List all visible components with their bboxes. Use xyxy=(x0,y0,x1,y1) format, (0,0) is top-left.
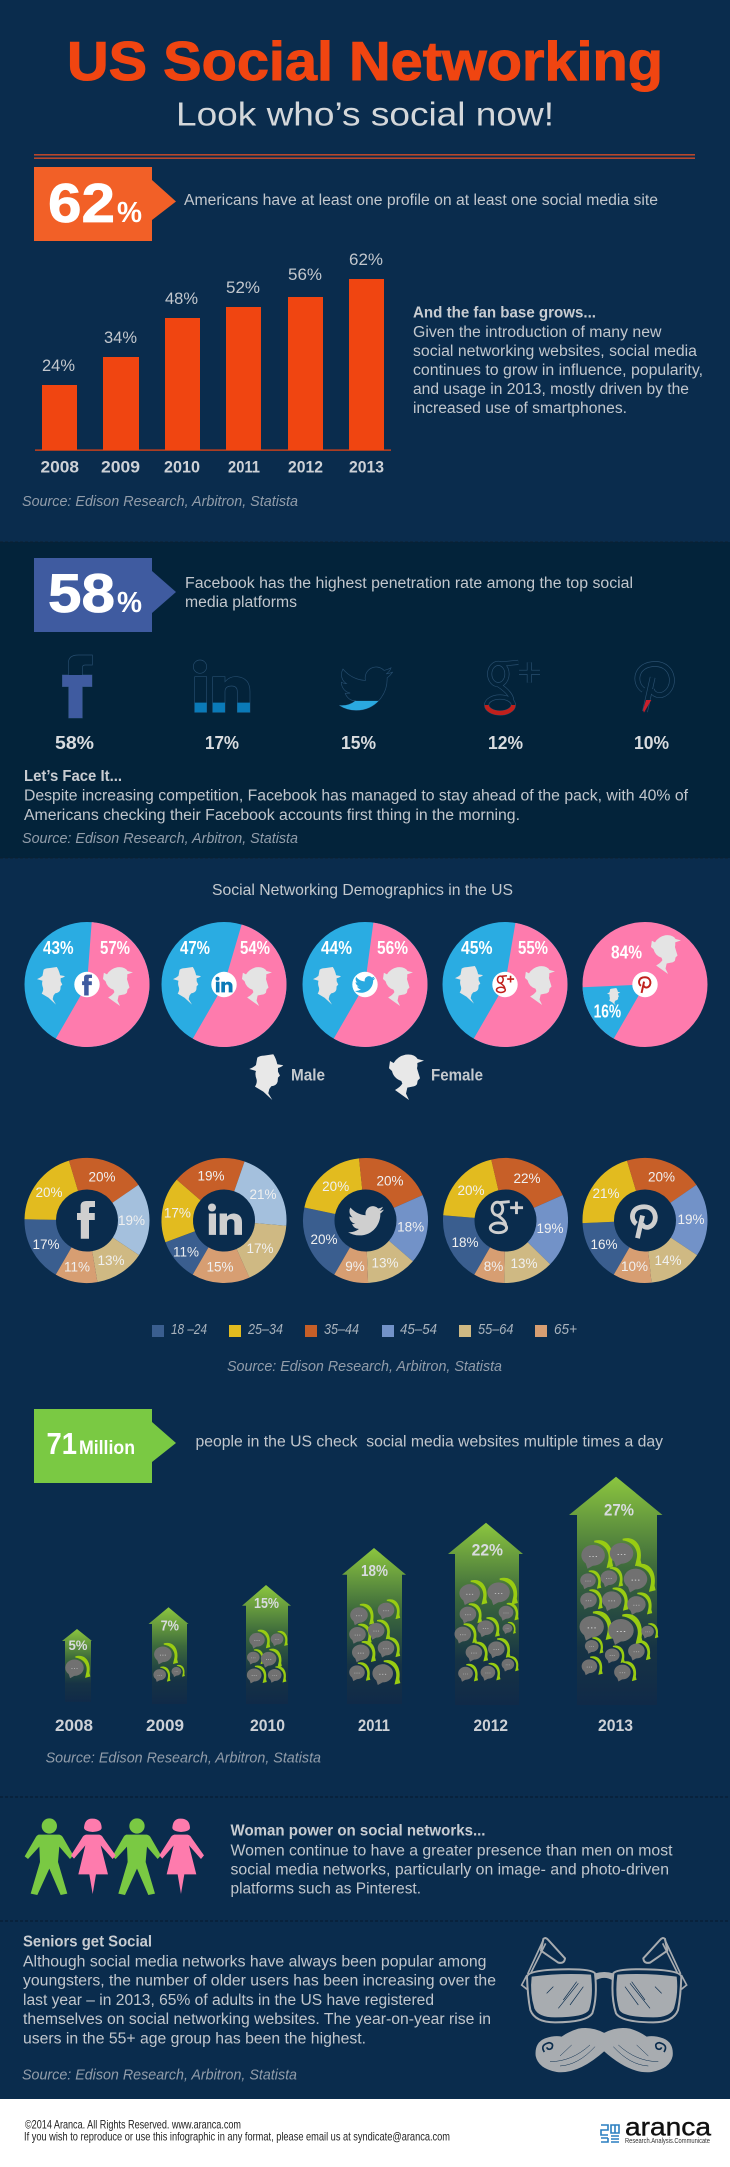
source note: Source: Edison Research, Arbitron, Statista xyxy=(227,1358,502,1375)
pie: facebook gender split: 57% xyxy=(100,938,130,958)
legend: age groups xyxy=(152,1322,577,1338)
legend: age groups: 45–54 xyxy=(400,1322,437,1338)
bar chart: social profile share by year: 2012 xyxy=(288,458,323,476)
callout: 58%: % xyxy=(117,587,142,619)
bar chart: social profile share by year xyxy=(35,250,391,476)
arrow: 2012: 22% xyxy=(472,1541,503,1560)
bar chart: social profile share by year: 2009 xyxy=(101,458,140,476)
bar chart: social profile share by year: 34% xyxy=(104,328,137,347)
legend: age groups: 65+ xyxy=(554,1322,577,1338)
arrow chart year labels: 2013 xyxy=(598,1717,633,1735)
pie: twitter gender split xyxy=(302,922,428,1047)
platform percentages xyxy=(55,732,669,753)
donut: pinterest age split: 14% xyxy=(654,1253,682,1268)
callout text: profile share: Americans have at least one profile on at least one social media site xyxy=(184,192,658,209)
text block: and the fan base grows: Given the introduction of many new xyxy=(413,324,662,341)
pie: google plus gender split: 55% xyxy=(518,938,548,958)
icon: pinterest partially filled xyxy=(637,664,672,713)
legend: male: Male xyxy=(291,1066,325,1085)
donut: pinterest age split: 16% xyxy=(590,1237,618,1252)
text block: woman power: Woman power on social networks... xyxy=(230,1823,486,1840)
platform percentages: 10% xyxy=(634,732,669,753)
icon: twitter partially filled xyxy=(339,667,393,710)
donut: google plus age split: 22% xyxy=(513,1171,541,1186)
text block: let's face it xyxy=(24,768,689,824)
donut: facebook age split: 17% xyxy=(32,1237,60,1252)
bar chart: social profile share by year: 2010 xyxy=(164,458,200,476)
footer copyright text xyxy=(24,2118,450,2144)
text block: seniors get social: last year – in 2013, 65% of adults in the US have registered xyxy=(23,1992,434,2009)
donut: facebook age split: 11% xyxy=(64,1260,90,1275)
arrow chart year labels: 2010 xyxy=(250,1717,285,1735)
pie: pinterest gender split: 16% xyxy=(594,1002,621,1022)
text block: seniors get social: youngsters, the number of older users has been increasing over the xyxy=(23,1973,496,1990)
bar chart: social profile share by year: 2008 xyxy=(40,458,79,476)
donut: twitter age split: 20% xyxy=(322,1179,349,1194)
arrow: 2013: 27% xyxy=(604,1501,634,1520)
donut: linkedin age split: 17% xyxy=(246,1241,274,1256)
text block: and the fan base grows: And the fan base grows... xyxy=(413,304,596,322)
arrow: 2009: 7% xyxy=(161,1618,179,1635)
arrow chart year labels: 2009 xyxy=(146,1717,184,1735)
donut: twitter age split: 9% xyxy=(345,1259,365,1274)
icon: facebook partially filled xyxy=(62,655,92,718)
source note: Source: Edison Research, Arbitron, Statista xyxy=(22,493,298,510)
bar chart: social profile share by year: 62% xyxy=(349,250,383,269)
callout: 71 million: 71 xyxy=(46,1426,77,1461)
text block: seniors get social: Seniors get Social xyxy=(23,1934,152,1951)
donut: twitter age split: 20% xyxy=(310,1232,338,1247)
donut: pinterest age split: 21% xyxy=(592,1186,620,1201)
icon: linkedin partially filled xyxy=(193,660,250,712)
callout: 58% xyxy=(34,558,176,632)
logo: aranca: aranca xyxy=(625,2114,711,2142)
donut: linkedin age split: 21% xyxy=(249,1187,277,1202)
donut: google plus age split: 20% xyxy=(457,1183,485,1198)
callout: 71 million xyxy=(34,1409,176,1483)
panel: platform penetration xyxy=(0,542,730,858)
platform percentages: 58% xyxy=(55,732,94,753)
donut: twitter age split: 20% xyxy=(376,1174,404,1189)
platform percentages: 17% xyxy=(205,732,239,753)
donut: facebook age split: 19% xyxy=(118,1213,145,1228)
donut: pinterest age split xyxy=(580,1155,710,1286)
text block: seniors get social: users in the 55+ age group has been the highest. xyxy=(23,2030,366,2047)
donut: google plus age split: 13% xyxy=(510,1256,538,1271)
footer copyright text: ©2014 Aranca. All Rights Reserved. www.aranca.com xyxy=(25,2118,241,2132)
text block: let's face it: Despite increasing competition, Facebook has managed to stay ahead of the pack, with 40% of xyxy=(24,788,689,804)
icon: people holding hands xyxy=(25,1818,204,1895)
header xyxy=(67,30,663,132)
platform percentages: 12% xyxy=(488,732,523,753)
icon: glasses and moustache xyxy=(522,1938,687,2072)
arrow: 2013 xyxy=(569,1477,662,1705)
donut: linkedin age split: 17% xyxy=(164,1206,191,1221)
donut: pinterest age split: 20% xyxy=(648,1170,675,1185)
text block: and the fan base grows: continues to grow in influence, popularity, xyxy=(413,362,703,379)
arrow chart year labels: 2008 xyxy=(55,1717,93,1735)
pie: linkedin gender split: 47% xyxy=(180,938,210,958)
arrow: 2012 xyxy=(448,1523,523,1705)
text block: and the fan base grows: and usage in 2013, mostly driven by the xyxy=(413,381,689,398)
bar chart: social profile share by year: 56% xyxy=(288,265,322,284)
pie: facebook gender split xyxy=(24,922,150,1047)
callout text: facebook penetration: media platforms xyxy=(185,594,297,611)
legend: female xyxy=(389,1054,483,1100)
footer copyright text: If you wish to reproduce or use this infographic in any format, please email us at syndicate@aranca.com xyxy=(24,2130,450,2144)
pie: google plus gender split xyxy=(442,922,568,1047)
callout text: daily checks: people in the US check social media websites multiple times a day xyxy=(196,1434,663,1451)
arrow chart year labels: 2012 xyxy=(474,1717,508,1735)
bar chart: social profile share by year: 2011 xyxy=(228,458,260,476)
pie: twitter gender split: 44% xyxy=(321,938,352,958)
legend: age groups: 55–64 xyxy=(478,1322,514,1338)
bar chart: social profile share by year: 48% xyxy=(165,289,198,308)
bar chart: social profile share by year: 2013 xyxy=(349,458,384,476)
donut: facebook age split: 13% xyxy=(97,1253,125,1268)
callout text: facebook penetration xyxy=(185,575,633,611)
arrow: 2011: 18% xyxy=(361,1563,388,1580)
bar chart: social profile share by year: 24% xyxy=(42,356,75,375)
donut: twitter age split xyxy=(300,1155,431,1286)
text block: let's face it: Americans checking their Facebook accounts first thing in the morning. xyxy=(24,807,520,824)
donut: google plus age split: 8% xyxy=(484,1259,503,1274)
donut: google plus age split xyxy=(439,1154,572,1287)
callout: 58%: 58 xyxy=(48,562,115,624)
bar chart: social profile share by year: 52% xyxy=(226,278,260,297)
donut: facebook age split: 20% xyxy=(88,1170,116,1185)
text block: seniors get social: themselves on social networking websites. The year-on-year rise in xyxy=(23,2011,491,2028)
donut: twitter age split: 18% xyxy=(397,1220,424,1235)
pie: linkedin gender split xyxy=(162,922,286,1047)
pie: linkedin gender split: 54% xyxy=(240,938,270,958)
text block: woman power xyxy=(230,1823,673,1898)
text block: woman power: platforms such as Pinterest. xyxy=(230,1881,421,1898)
logo: aranca xyxy=(601,2114,711,2145)
pie: google plus gender split: 45% xyxy=(461,938,492,958)
text block: seniors get social xyxy=(23,1934,496,2047)
panel: footer xyxy=(0,2099,730,2167)
arrow: 2010: 15% xyxy=(254,1595,279,1612)
callout: 62% xyxy=(34,167,176,241)
logo: aranca: Research.Analysis.Communicate xyxy=(625,2138,710,2145)
donut: google plus age split: 18% xyxy=(451,1235,479,1250)
arrow chart year labels xyxy=(55,1717,633,1735)
callout: 62%: % xyxy=(117,197,142,229)
arrow: 2009 xyxy=(148,1607,188,1704)
callout: 62%: 62 xyxy=(48,172,115,234)
callout: 71 million: Million xyxy=(79,1438,135,1459)
arrow: 2011 xyxy=(342,1548,406,1704)
donut: facebook age split xyxy=(22,1155,152,1286)
legend: age groups: 35–44 xyxy=(324,1322,359,1338)
donut: linkedin age split: 19% xyxy=(197,1169,225,1184)
legend: age groups: 25–34 xyxy=(247,1322,283,1338)
donut: linkedin age split: 15% xyxy=(206,1260,234,1275)
subtitle: Look who’s social now! xyxy=(176,96,554,132)
arrow: 2008 xyxy=(62,1629,92,1702)
title: US Social Networking xyxy=(67,30,663,92)
arrow: 2010 xyxy=(242,1585,291,1704)
pie: pinterest gender split xyxy=(582,922,708,1047)
donut: linkedin age split: 11% xyxy=(173,1245,199,1260)
pie: twitter gender split: 56% xyxy=(377,938,408,958)
icon: google plus partially filled xyxy=(487,662,540,713)
heading: demographics: Social Networking Demographics in the US xyxy=(212,882,513,899)
arrow: 2008: 5% xyxy=(68,1637,88,1653)
pie: facebook gender split: 43% xyxy=(43,938,74,958)
legend: female: Female xyxy=(431,1066,483,1085)
text block: woman power: social media networks, particularly on image- and photo-driven xyxy=(230,1862,669,1879)
donut: linkedin age split xyxy=(158,1155,290,1286)
callout text: facebook penetration: Facebook has the highest penetration rate among the top social xyxy=(185,575,633,592)
text block: and the fan base grows: increased use of smartphones. xyxy=(413,400,627,417)
donut: google plus age split: 19% xyxy=(536,1221,564,1236)
donut: pinterest age split: 10% xyxy=(621,1259,648,1274)
source note: Source: Edison Research, Arbitron, Statista xyxy=(46,1750,321,1767)
source note: Source: Edison Research, Arbitron, Statista xyxy=(22,2066,297,2083)
donut: facebook age split: 20% xyxy=(35,1185,63,1200)
source note: Source: Edison Research, Arbitron, Statista xyxy=(22,830,298,847)
pie: pinterest gender split: 84% xyxy=(611,943,642,963)
text block: woman power: Women continue to have a greater presence than men on most xyxy=(230,1842,673,1859)
text block: and the fan base grows xyxy=(413,304,703,417)
donut: pinterest age split: 19% xyxy=(677,1212,705,1227)
donut: twitter age split: 13% xyxy=(371,1256,399,1271)
legend: age groups: 18 –24 xyxy=(171,1322,207,1338)
platform percentages: 15% xyxy=(341,732,376,753)
text block: let's face it: Let’s Face It... xyxy=(24,768,122,785)
text block: seniors get social: Although social media networks have always been popular among xyxy=(23,1954,486,1971)
text block: and the fan base grows: social networking websites, social media xyxy=(413,343,697,360)
arrow chart year labels: 2011 xyxy=(358,1717,390,1735)
legend: male xyxy=(249,1054,325,1100)
